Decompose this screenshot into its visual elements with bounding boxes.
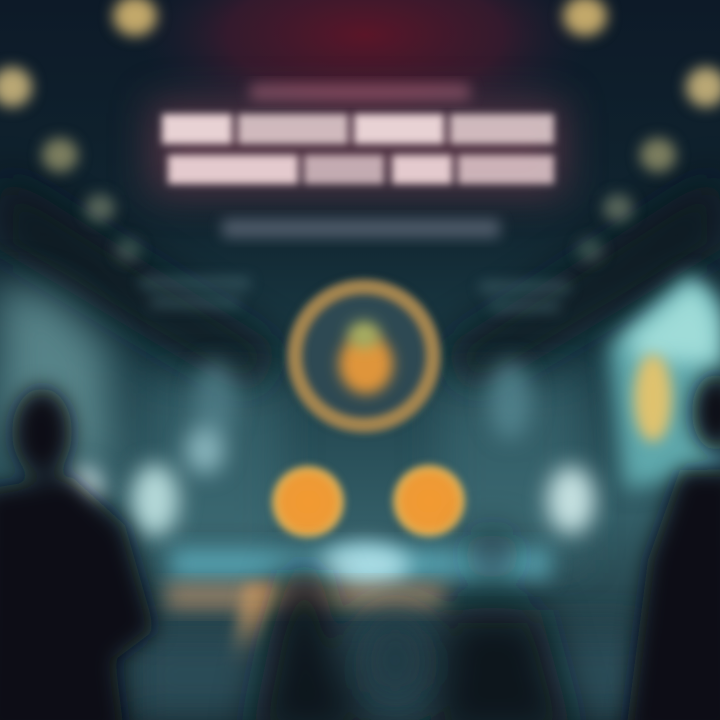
coin right <box>393 465 465 537</box>
lower floor <box>130 630 650 720</box>
screen panel <box>608 275 720 490</box>
coin left <box>272 466 344 538</box>
emblem disc <box>294 286 434 426</box>
warm band <box>165 585 445 609</box>
light blobs <box>67 360 595 536</box>
emblem ring <box>295 287 433 425</box>
screen yellow area <box>634 354 672 442</box>
subtitle <box>222 219 500 238</box>
eyebrow line <box>250 84 470 100</box>
silhouette: left person <box>0 388 155 720</box>
glowing coins <box>272 465 465 538</box>
right screen <box>608 275 720 490</box>
side walls <box>0 280 580 560</box>
silhouette: audience <box>250 533 575 720</box>
title line 2 <box>168 155 554 184</box>
bright centre <box>320 543 410 587</box>
faint side captions <box>140 278 570 311</box>
ceiling lights <box>0 0 720 262</box>
stage band <box>165 543 550 680</box>
emblem centre <box>339 334 393 394</box>
ceiling glow <box>135 0 595 135</box>
silhouette: right person <box>625 374 720 720</box>
emblem <box>294 286 434 426</box>
title block <box>150 84 565 238</box>
teal band <box>170 548 550 580</box>
emblem highlight <box>348 321 380 349</box>
warm column <box>225 585 278 680</box>
screen bright area <box>625 280 720 365</box>
title glow <box>150 100 565 195</box>
title line 1 <box>162 114 554 144</box>
ceiling beams <box>0 170 720 400</box>
